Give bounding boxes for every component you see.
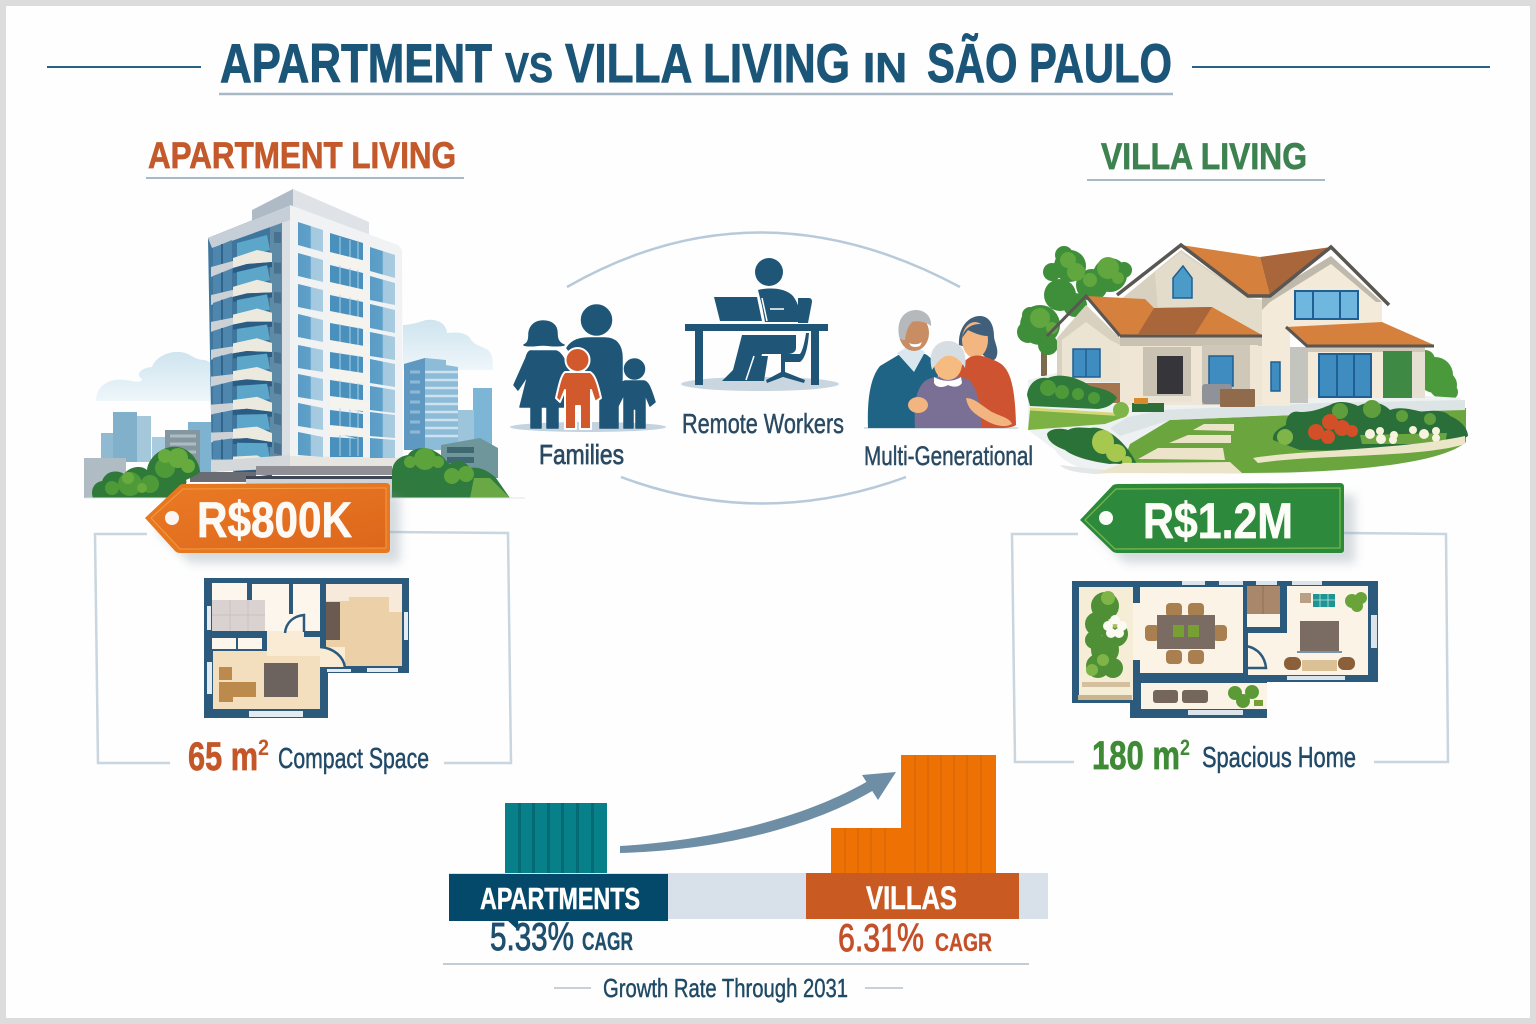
tower base — [256, 466, 392, 475]
tree — [1017, 246, 1132, 376]
torso — [758, 288, 801, 322]
icon: families — [510, 305, 666, 432]
heading: apartment living: APARTMENT LIVING — [148, 135, 456, 176]
label: remote workers: Remote Workers — [682, 408, 844, 439]
tower left face — [208, 205, 290, 472]
label: apartments: APARTMENTS — [480, 881, 640, 916]
man — [567, 305, 622, 428]
caption: growth rate: Growth Rate Through 2031 — [603, 973, 848, 1003]
left wing window — [1073, 349, 1100, 377]
chair back — [798, 298, 812, 323]
label: villas: VILLAS — [866, 880, 957, 916]
bar: apartments — [505, 803, 607, 875]
grandmother — [908, 341, 1012, 428]
chair base — [766, 333, 809, 383]
tower floors — [211, 232, 281, 489]
title: APARTMENT — [220, 32, 492, 94]
floor plan: villa — [1072, 581, 1378, 718]
stepping stones — [1097, 424, 1242, 473]
label: villas — [806, 873, 1019, 919]
shrubs — [92, 447, 510, 498]
center wall — [1120, 336, 1262, 405]
clouds — [96, 320, 493, 401]
caption: apartment size: 2 — [258, 735, 269, 760]
caption: villa size — [1092, 734, 1356, 778]
girl — [556, 348, 601, 429]
panel: apartment frame — [95, 532, 511, 763]
tower roof — [252, 189, 293, 222]
label: apartments — [449, 874, 668, 931]
title: VS — [505, 44, 553, 91]
illustration: apartment tower and city — [84, 189, 525, 498]
price tag: villa — [1080, 483, 1355, 563]
right lower wall — [1262, 330, 1290, 406]
value: apartments cagr: CAGR — [582, 928, 633, 956]
caption: villa size: Spacious Home — [1202, 742, 1356, 774]
label: multi-generational: Multi-Generational — [864, 441, 1033, 471]
porch and door — [1143, 347, 1191, 401]
shrubs by house — [1027, 376, 1164, 418]
main roof — [1181, 245, 1270, 296]
price tag: villa: R$1.2M — [1143, 493, 1293, 549]
title — [47, 32, 1490, 94]
upper window — [1295, 291, 1358, 319]
bedroom — [1284, 592, 1367, 671]
panel: villa frame — [1012, 533, 1448, 762]
label: families: Families — [539, 439, 624, 470]
desk — [685, 324, 828, 331]
lower left wing wall — [1057, 305, 1120, 382]
laptop — [714, 297, 762, 321]
value: villas cagr: CAGR — [935, 929, 992, 957]
city background right — [404, 358, 498, 478]
woman — [514, 321, 574, 428]
older man — [868, 310, 940, 428]
right lower roof — [1286, 322, 1434, 345]
lower lawn and terrain — [1028, 372, 1466, 474]
caption: apartment size — [188, 735, 429, 779]
title: IN — [863, 44, 907, 91]
caption: apartment size: 65 m — [188, 735, 258, 779]
dining set — [1145, 603, 1227, 664]
value: villas cagr: 6.31% — [838, 917, 924, 960]
icon arc top — [567, 232, 960, 287]
gable window — [1173, 266, 1192, 298]
caption: apartment size: Compact Space — [278, 743, 429, 775]
title: SÃO PAULO — [927, 32, 1172, 94]
lounge — [1153, 685, 1263, 708]
caption: villa size: 2 — [1180, 735, 1190, 760]
floor plan: apartment — [204, 578, 409, 718]
boy — [613, 359, 655, 428]
track — [449, 873, 1048, 919]
city background left — [84, 412, 214, 498]
upper gable wall — [1120, 250, 1264, 340]
title: VILLA LIVING — [565, 32, 850, 94]
right shrub behind house — [1415, 350, 1458, 400]
arrow — [620, 772, 896, 853]
icon: remote worker — [681, 258, 839, 391]
icon: multi-generational family — [864, 310, 1018, 428]
garden — [1078, 591, 1132, 700]
icon arc bottom — [621, 477, 906, 504]
price tag: apartment: R$800K — [197, 492, 352, 548]
illustration: villa — [1017, 245, 1468, 474]
tower right face — [290, 205, 403, 466]
caption: villa size: 180 m — [1092, 734, 1180, 778]
heading: villa living: VILLA LIVING — [1101, 136, 1307, 177]
lower left roof — [1086, 296, 1262, 335]
bars: villas — [831, 755, 996, 874]
front-left bush — [1047, 428, 1137, 474]
value: apartments cagr: 5.33% — [490, 916, 574, 959]
legs — [722, 335, 796, 381]
price tag: apartment — [145, 483, 400, 563]
chart: growth comparison — [443, 755, 1048, 1003]
tower windows — [298, 222, 395, 458]
right gable wall — [1262, 256, 1382, 405]
younger woman — [950, 316, 1016, 428]
flower bed — [1253, 400, 1468, 463]
